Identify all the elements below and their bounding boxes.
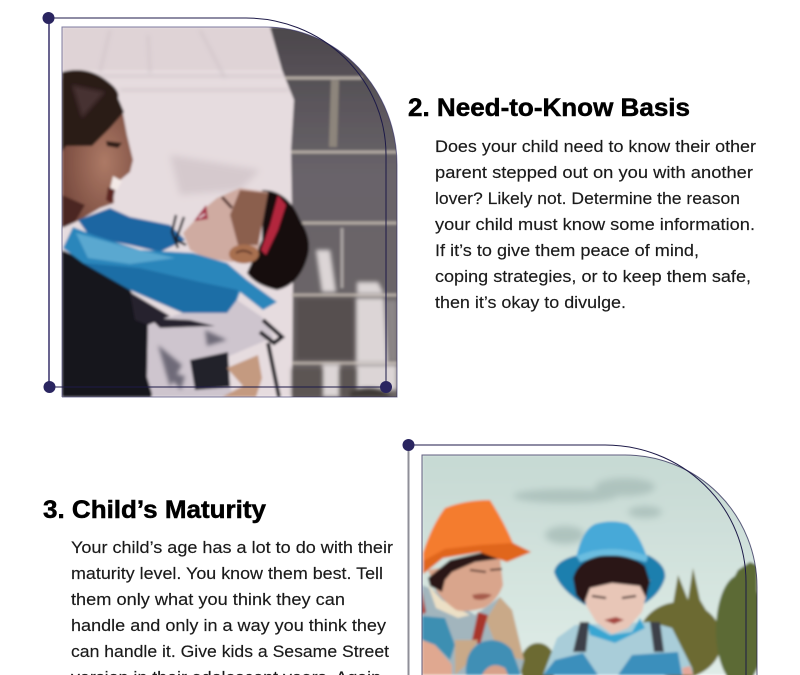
trees (520, 562, 764, 675)
mother hair (62, 70, 124, 152)
orange hat (422, 498, 514, 562)
dress strap (260, 320, 282, 397)
panel: photo frame, two boys in hats (402, 439, 764, 675)
blue hat brim (554, 555, 665, 605)
mother body (62, 250, 152, 397)
wall light streaks (316, 250, 397, 397)
section 2 text (408, 94, 757, 312)
body text: section 3: handle and only in a way you think they (71, 617, 387, 635)
child headband (261, 195, 286, 255)
wall shadow (270, 27, 400, 400)
left boy overalls and arm (422, 616, 455, 660)
child ear (229, 244, 259, 264)
child hair (247, 190, 309, 290)
right boy face (583, 580, 650, 634)
child neck and face (183, 188, 268, 262)
body text: section 3: can handle it. Give kids a Sesame Street (71, 643, 389, 661)
clouds (513, 478, 662, 544)
suspenders (573, 622, 664, 652)
blue hat crown (576, 522, 648, 560)
body text: section 2: coping strategies, or to keep them safe, (435, 268, 751, 286)
child blue sleeve (63, 227, 277, 313)
mother smile (110, 176, 122, 190)
body text: section 3: maturity level. You know them best. Tell (71, 565, 383, 583)
photo outline (62, 27, 397, 397)
child dress (147, 300, 274, 397)
mother face and neck (62, 108, 133, 228)
photo: mother lifting laughing child (62, 27, 400, 400)
body text: section 2: your child must know some information. (435, 216, 755, 234)
mother hand (222, 355, 262, 397)
mortar lines (285, 78, 397, 363)
right boy shirt (543, 622, 693, 675)
frame lines (49, 18, 386, 387)
left boy face (428, 558, 503, 611)
body text: section 2: Does your child need to know their other (435, 138, 757, 156)
body text: section 2: parent stepped out on you with another (435, 164, 754, 182)
hood tie (172, 215, 186, 248)
body text: section 3: them only what you think they can (71, 591, 345, 609)
body text: section 3 (71, 539, 394, 675)
frame lines (408, 445, 746, 675)
body text: section 2: lover? Likely not. Determine the reason (435, 190, 740, 208)
panel: photo frame, mother and child (42, 12, 400, 400)
body text: section 2: then it’s okay to divulge. (435, 294, 626, 312)
frame dot (402, 439, 414, 451)
left boy shirt (422, 585, 524, 675)
right boy hair (573, 555, 650, 604)
photo outline (422, 455, 757, 675)
heading: Need-to-Know Basis: 2. Need-to-Know Basis (408, 94, 690, 122)
body text: section 2: If it’s to give them peace of mind, (435, 242, 699, 260)
section 3 text (43, 496, 394, 675)
frame dots (42, 12, 392, 393)
photo: two boys in orange and blue hats (422, 455, 764, 675)
body text: section 2 (435, 138, 757, 312)
heading: Child's Maturity: 3. Child’s Maturity (43, 496, 266, 524)
left boy hair (426, 550, 498, 593)
body text: section 3: Your child’s age has a lot to do with their (71, 539, 394, 557)
right boy knees (543, 653, 598, 675)
mother sleeve (78, 208, 185, 252)
